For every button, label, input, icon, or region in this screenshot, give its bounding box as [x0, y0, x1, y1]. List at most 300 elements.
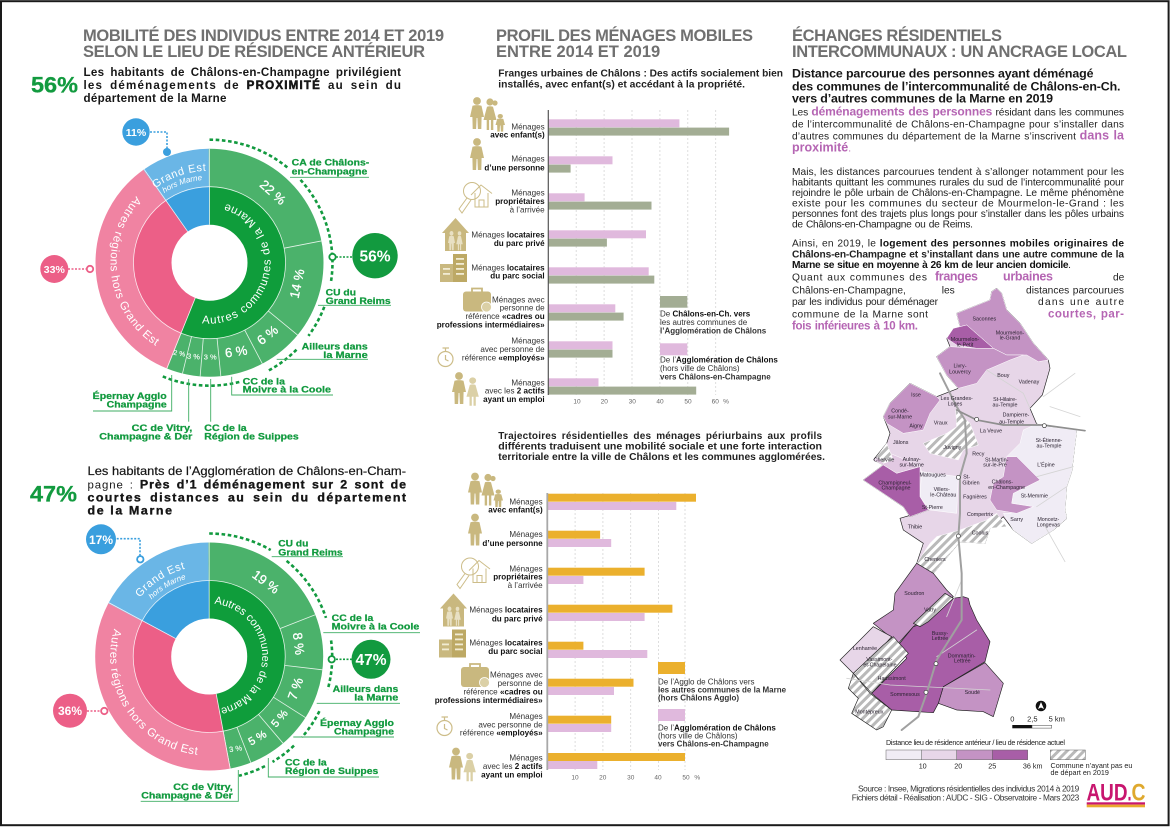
- map: noms des communes: au-Temple: [993, 403, 1017, 409]
- map: noms des communes: Villers-: [934, 487, 950, 493]
- label: CA de Châlons-en-Champagne: en-Champagne: [292, 166, 367, 176]
- map: noms des communes: St-Pierre: [922, 505, 943, 511]
- callout: 47 %: pagne : Près d’1 déménagement sur 2 sont de: [88, 478, 406, 492]
- map: noms des communes: Condé-: [891, 409, 909, 415]
- map legend: 36 km: [1023, 761, 1042, 770]
- map: noms des communes: Gibrien: [962, 480, 980, 486]
- axis values: 50: [684, 398, 692, 405]
- heading: trajectoires résidentielles: Trajectoires résidentielles des ménages périurbains aux profils: [498, 431, 822, 442]
- label: CC de Vitry, Champagne et Der: [99, 379, 193, 441]
- text block: distances: habitants quittant les communes rurales du sud de l’intercommunalité pour: [792, 178, 1125, 188]
- label: Ailleurs dans la Marne: Ailleurs dans: [302, 341, 368, 351]
- label: CU du Grand Reims: Grand Reims: [326, 296, 391, 306]
- category labels: Ménages: [511, 378, 545, 387]
- map legend: Distance lieu de résidence antérieur / lieu de résidence actuel: [886, 738, 1065, 747]
- category labels: Ménages locataires: [471, 263, 545, 272]
- category labels: du parc privé: [492, 614, 543, 623]
- map: noms des communes: Livry-: [953, 364, 967, 370]
- map: noms des communes: St-Étienne-: [1036, 437, 1063, 444]
- map: noms des communes: Saconnes: [972, 317, 997, 323]
- text block: franges urbaines: urbaines: [1003, 270, 1053, 284]
- map: noms des communes: Juvigny: [943, 445, 962, 451]
- text block: franges urbaines: distances parcourues: [1026, 285, 1124, 296]
- callout: 47 %: courtes distances au sein du département: [88, 490, 406, 504]
- title: échanges résidentiels: [792, 26, 1127, 61]
- label: CA de Châlons-en-Champagne: CA de Châlons-: [292, 158, 369, 168]
- label: Ailleurs dans la Marne: la Marne: [354, 693, 398, 703]
- heading: distance parcourue: vers d’autres communes de la Marne en 2019: [792, 92, 1053, 106]
- map: noms des communes: Dommartin-: [948, 653, 976, 659]
- category labels: à l’arrivée: [508, 581, 543, 590]
- bubble: 11 %: [122, 118, 171, 156]
- title: profil des ménages mobiles: ENTRE 2014 ET 2019: [496, 43, 660, 61]
- category labels: professions intermédiaires»: [437, 321, 545, 330]
- category labels: personne de: [498, 679, 543, 688]
- category labels: [435, 497, 543, 780]
- heading: franges urbaines: installés, avec enfant(s) et accédant à la propriété.: [498, 79, 745, 90]
- category labels: Ménages: [511, 155, 545, 164]
- segment percentages: 3 %: [187, 352, 200, 361]
- segment percentages: [229, 567, 308, 754]
- label: Épernay Agglo Champagne: Champagne: [334, 726, 394, 736]
- category labels: Ménages locataires: [471, 230, 545, 239]
- category labels: Ménages: [511, 122, 545, 131]
- map: noms des communes: Loges: [948, 401, 963, 407]
- map: noms des communes: Soudron: [904, 591, 924, 597]
- scale bar: 2,5: [1027, 715, 1038, 724]
- map: noms des communes: [853, 317, 1063, 716]
- category labels: Ménages avec: [492, 295, 545, 304]
- title: mobilité des individus: SELON LE LIEU DE RÉSIDENCE ANTÉRIEUR: [83, 42, 425, 61]
- category labels: référence «cadres ou: [463, 687, 543, 696]
- category labels: avec les 2 actifs: [483, 762, 543, 771]
- category labels: avec enfant(s): [488, 506, 543, 515]
- category labels: ayant un emploi: [481, 771, 543, 780]
- text block: franges urbaines: courtes, par-: [1048, 308, 1124, 320]
- segment percentages: 14 %: [287, 267, 308, 300]
- map: noms des communes: Lenharrée: [853, 646, 877, 652]
- title: mobilité des individus: [83, 26, 444, 61]
- title: échanges résidentiels: ÉCHANGES RÉSIDENTIELS: [792, 26, 1002, 45]
- map: échangeurs: [924, 417, 1046, 694]
- map: noms des communes: Aulnay-: [903, 457, 921, 463]
- text block: déménagements: de l’intercommunalité de Châlons-en-Champagne pour s’installer dans: [792, 120, 1124, 131]
- axis values: 50: [682, 774, 690, 781]
- map: noms des communes: Vraux: [934, 420, 948, 426]
- map: noms des communes: Champagne: [881, 486, 911, 492]
- icon: personne seule: [470, 138, 484, 170]
- map: noms des communes: Recy: [972, 452, 985, 458]
- text block: logement: [792, 239, 1124, 271]
- map: noms des communes: Lettrée: [954, 659, 971, 665]
- segment percentages: 6 %: [224, 342, 249, 360]
- text block: distances: rejoindre le pôle urbain de Châlons-en-Champagne. Le même phénomène: [792, 188, 1124, 199]
- map: noms des communes: le-Château: [930, 493, 956, 499]
- bar chart: franges urbaines: [437, 110, 729, 405]
- category labels: Ménages: [509, 564, 543, 573]
- axis values: 60: [712, 398, 719, 405]
- map: noms des communes: Lettrée: [932, 636, 948, 642]
- icon: mallette: [461, 664, 490, 688]
- icon: famille avec enfants: [470, 97, 505, 132]
- heading: distance parcourue: des communes de l’intercommunalité de Châlons-en-Ch.: [792, 80, 1120, 94]
- title: profil des ménages mobiles: [496, 26, 753, 61]
- label: CC de la Région de Suippes: CC de la: [285, 757, 328, 767]
- logo: AUDC: AUD: [1086, 780, 1128, 807]
- segment percentages: [173, 177, 308, 361]
- axis values: %: [694, 774, 700, 781]
- bubble: 47 %: 47%: [355, 652, 387, 669]
- label: CC de la Région de Suippes: [268, 757, 379, 777]
- label: CC de la Moivre à la Coole: Moivre à la Coole: [243, 385, 331, 395]
- label: Ailleurs dans la Marne: [317, 684, 400, 703]
- map legend: 25: [988, 761, 996, 770]
- source: Source : Insee, Migrations résidentielles des individus 2014 à 2019: [858, 784, 1080, 794]
- text block: déménagements: d’autres communes du département de la Marne s’inscrivent dans la: [792, 128, 1125, 142]
- ring label: Grand Est: Grand Est: [152, 164, 206, 187]
- category labels: professions intermédiaires»: [435, 696, 543, 705]
- scale bar: [1010, 715, 1065, 728]
- map: noms des communes: Châlons-: [992, 479, 1013, 485]
- map: noms des communes: Les Grandes-: [941, 396, 973, 402]
- label: Épernay Agglo Champagne: Champagne: [107, 400, 167, 410]
- donut chart: Agglomération de Châlons: [95, 532, 334, 777]
- axis values: 10: [573, 398, 581, 405]
- title: mobilité des individus: MOBILITÉ DES INDIVIDUS ENTRE 2014 ET 2019: [83, 26, 444, 45]
- text block: franges urbaines: franges: [935, 270, 978, 284]
- text block: logement: Marne se situe en moyenne à 26 km de leur ancien domicile.: [792, 260, 1071, 271]
- legend: franges urbaines: (hors ville de Châlons): [660, 364, 740, 373]
- callout: 56 % proximité: Les habitants de Châlons-en-Champagne privilégient: [84, 66, 401, 79]
- category labels: propriétaires: [495, 197, 545, 206]
- text block: franges urbaines: par les individus pour déménager: [792, 297, 939, 308]
- bubble: 36 %: 36%: [58, 704, 82, 718]
- label: CC de la Région de Suippes: Région de Suippes: [204, 431, 299, 441]
- ring label: hors Marne: hors Marne: [148, 575, 186, 600]
- axis values: 40: [654, 774, 662, 781]
- map: noms des communes: le-Grand: [1000, 336, 1020, 342]
- text block: franges urbaines: de: [1113, 273, 1125, 284]
- category labels: d’une personne: [484, 163, 545, 172]
- label: CC de la Moivre à la Coole: Moivre à la Coole: [332, 621, 419, 631]
- label: CU du Grand Reims: CU du: [278, 539, 308, 549]
- map: noms des communes: Aigny: [909, 424, 923, 430]
- bars: vers Agglomération: [548, 128, 729, 395]
- map: distance parcourue par commune: [840, 288, 1085, 730]
- category labels: ayant un emploi: [483, 395, 545, 404]
- label: Épernay Agglo Champagne: Épernay Agglo: [93, 391, 167, 401]
- map: noms des communes: Thibie: [908, 525, 922, 531]
- map: noms des communes: Vadenay: [1019, 380, 1040, 386]
- legend: trajectoires: (hors Châlons Agglo): [658, 694, 739, 702]
- map: noms des communes: Soudé: [965, 690, 980, 696]
- label: CU du Grand Reims: [318, 287, 391, 306]
- map: limites intercommunales nord: [863, 288, 1077, 573]
- category labels: propriétaires: [493, 573, 543, 582]
- label: Ailleurs dans la Marne: la Marne: [323, 350, 368, 360]
- category labels: avec les 2 actifs: [485, 387, 545, 396]
- label: CC de la Moivre à la Coole: [323, 613, 420, 633]
- icon: personne seule: [468, 514, 482, 546]
- title: profil des ménages mobiles: PROFIL DES MÉNAGES MOBILES: [496, 26, 753, 45]
- scale bar: 5 km: [1049, 715, 1065, 724]
- label: Épernay Agglo Champagne: [293, 718, 395, 737]
- icon: maison avec habitants: [440, 594, 467, 626]
- label: CC de la Région de Suippes: Région de Suippes: [285, 766, 378, 776]
- map legend: Commune n’ayant pas eu: [1050, 761, 1132, 770]
- callout: 47 %: [30, 465, 406, 518]
- segment percentages: 6 %: [254, 322, 281, 348]
- icon: famille avec enfants: [468, 473, 503, 507]
- label: Ailleurs dans la Marne: Ailleurs dans: [333, 684, 398, 694]
- text block: distances: existe pour les communes du secteur de Mourmelon-le-Grand : les: [792, 198, 1124, 210]
- map: noms des communes: le-Petit: [957, 342, 974, 348]
- scale bar: 0: [1010, 715, 1014, 724]
- axis values: [573, 398, 729, 405]
- donut chart: Châlons-en-Champagne: [96, 138, 334, 387]
- map: noms des communes: sur-Marne: [900, 462, 924, 468]
- heading: franges urbaines: [498, 69, 783, 90]
- category labels: du parc social: [490, 272, 545, 281]
- map: noms des communes: Mourmelon-: [996, 330, 1024, 336]
- map: noms des communes: Moncetz-: [1037, 517, 1060, 523]
- heading: franges urbaines: Franges urbaines de Châlons : Des actifs socialement bien: [498, 69, 783, 80]
- source: [852, 784, 1080, 802]
- map: noms des communes: St-Hilaire-: [993, 397, 1017, 403]
- category labels: à l’arrivée: [510, 205, 545, 214]
- legend: franges urbaines: De l’Agglomération de Châlons: [660, 356, 778, 365]
- map: noms des communes: Sommesous: [890, 692, 920, 698]
- map: noms des communes: sur-le-Pré: [983, 463, 1007, 469]
- map: noms des communes: Jâlons: [893, 440, 909, 446]
- bubble: 56 %: [329, 233, 398, 278]
- text block: distances: de Châlons-en-Champagne ou de Reims.: [792, 220, 973, 230]
- map: noms des communes: au-Temple: [999, 419, 1024, 425]
- map: noms des communes: Louvercy: [949, 369, 971, 375]
- category labels: Ménages: [509, 530, 543, 539]
- bubble: 17 %: [86, 524, 144, 562]
- map: noms des communes: Haussimont: [878, 676, 906, 682]
- icon: couple d'actifs: [449, 748, 476, 781]
- ring label: hors Marne: hors Marne: [162, 176, 202, 193]
- map: noms des communes: et-Chapelaine: [863, 662, 897, 668]
- segment percentages: 3 %: [229, 743, 243, 754]
- ring label: Grand Est: Grand Est: [136, 562, 185, 596]
- label: CA de Châlons-en-Champagne: [290, 158, 369, 177]
- legend: trajectoires: [658, 662, 787, 749]
- label: Ailleurs dans la Marne: [277, 341, 368, 360]
- callout: 47 %: Les habitants de l’Agglomération de Châlons-en-Cham-: [88, 465, 406, 478]
- map: noms des communes: Cherville: [874, 458, 894, 464]
- label: CC de Vitry, Champagne et Der: CC de Vitry,: [132, 423, 192, 433]
- map: noms des communes: Matougues: [919, 473, 946, 479]
- label: CU du Grand Reims: [272, 539, 343, 557]
- axis values: 40: [656, 398, 664, 405]
- bubble: 56 %: 56%: [359, 248, 391, 266]
- map: noms des communes: Mourmelon-: [951, 337, 979, 343]
- map: noms des communes: Longevas: [1037, 523, 1060, 529]
- segment percentages: 5 %: [269, 708, 291, 730]
- category labels: du parc privé: [494, 239, 545, 248]
- category labels: Ménages: [511, 337, 545, 346]
- map: noms des communes: St-: [963, 474, 970, 480]
- axis values: 30: [629, 398, 636, 405]
- map: noms des communes: au-Temple: [1037, 443, 1061, 449]
- label: Épernay Agglo Champagne: Épernay Agglo: [320, 718, 395, 728]
- map: noms des communes: L’Épine: [1037, 461, 1055, 468]
- map: réseau routier: [847, 370, 1085, 730]
- axis values: [571, 774, 700, 781]
- legend: trajectoires: les autres communes de la Marne: [658, 686, 787, 694]
- icon: couple d'actifs: [452, 372, 479, 406]
- callout: 56 % proximité: département de la Marne: [84, 92, 227, 105]
- map: noms des communes: Compertrix: [967, 512, 993, 518]
- label: CC de la Région de Suippes: [204, 379, 299, 441]
- icon: clés et maison: [457, 558, 490, 588]
- category labels: Ménages avec: [490, 671, 543, 680]
- map: noms des communes: Fagnières: [963, 494, 987, 500]
- bubble: 33 %: 33%: [44, 264, 65, 276]
- text block: franges urbaines: les: [942, 285, 955, 296]
- text block: distances: personnes font des trajets plus longs pour s’installer dans les pôles urbains: [792, 209, 1124, 220]
- bubble: 17 %: 17%: [89, 533, 113, 547]
- category labels: Ménages locataires: [469, 606, 543, 615]
- map: noms des communes: St-Martin-: [985, 458, 1009, 464]
- callout: 56 % proximité: les déménagements de PROXIMITÉ au sein du: [84, 79, 401, 92]
- category labels: avec personne de: [480, 345, 545, 354]
- segment percentages: 5 %: [246, 728, 269, 748]
- label: CC de la Moivre à la Coole: [232, 376, 333, 395]
- icon: mallette: [463, 288, 492, 312]
- heading: distance parcourue: [792, 67, 1120, 106]
- bars: vers Châlons: [548, 119, 679, 386]
- label: CC de Vitry, Champagne et Der: Champagne & Der: [99, 431, 193, 441]
- text block: déménagements: Les déménagements des personnes résidant dans les communes: [792, 105, 1124, 119]
- legend: trajectoires: vers Châlons-en-Champagne: [658, 740, 769, 749]
- bar chart: trajectoires: [435, 493, 700, 781]
- heading: trajectoires résidentielles: [498, 431, 825, 463]
- title: échanges résidentiels: INTERCOMMUNAUX : UN ANCRAGE LOCAL: [792, 43, 1127, 61]
- callout: 56 % proximité: [31, 66, 401, 105]
- logo: AUDC: .: [1128, 780, 1132, 807]
- map: noms des communes: Isse: [911, 393, 921, 399]
- text block: franges urbaines: fois inférieures à 10 km.: [792, 320, 918, 332]
- map: noms des communes: Montépreux: [855, 710, 884, 716]
- dotted arc: Marne: [209, 534, 332, 776]
- ring label: autres communes de la Marne: Autres communes de la Marne: [202, 204, 271, 324]
- legend: franges urbaines: l’Agglomération de Châlons: [660, 326, 767, 335]
- category labels: Ménages: [509, 754, 543, 763]
- map: noms des communes: Coolus: [972, 530, 989, 536]
- axis values: 20: [601, 398, 608, 405]
- text block: distances: [792, 167, 1125, 230]
- icon: chronomètre: [437, 717, 452, 736]
- category labels: [437, 122, 545, 404]
- category labels: référence «cadres ou: [465, 312, 545, 321]
- label: CC de Vitry, Champagne et Der: Champagne & Der: [141, 790, 233, 800]
- category labels: Ménages: [509, 712, 543, 721]
- map: limites intercommunales sud: [840, 563, 1003, 730]
- label: CC de la Région de Suippes: CC de la: [204, 423, 248, 433]
- icon: clés et maison: [459, 182, 492, 213]
- category labels: avec personne de: [478, 720, 543, 729]
- label: CU du Grand Reims: Grand Reims: [278, 547, 343, 557]
- label: CC de Vitry, Champagne et Der: [141, 770, 238, 801]
- map: noms des communes: Bussy-: [932, 631, 948, 637]
- bubble: 47 %: [328, 640, 390, 679]
- icon: chronomètre: [438, 348, 453, 366]
- logo: AUDC: C: [1132, 780, 1146, 807]
- heading: distance parcourue: Distance parcourue des personnes ayant déménagé: [792, 67, 1094, 81]
- map: noms des communes: St-Memmie: [1021, 494, 1048, 500]
- segment percentages: 19 %: [249, 567, 282, 597]
- map: noms des communes: Vatry: [924, 608, 936, 614]
- ring label: autres régions hors Grand Est: Autres régions hors Grand Est: [110, 196, 159, 346]
- bubble: 33 %: [40, 255, 93, 283]
- segment percentages: 2 %: [173, 350, 186, 359]
- ring label: autres communes de la Marne: Autres communes de la Marne: [214, 596, 268, 714]
- legend: trajectoires: (hors ville de Châlons): [658, 732, 738, 741]
- map legend: 10: [919, 761, 927, 770]
- segment percentages: 22 %: [257, 177, 289, 208]
- category labels: référence «employés»: [460, 729, 543, 738]
- heading: trajectoires résidentielles: différents traduisent une mobilité sociale et une forte interaction: [498, 441, 822, 452]
- text block: franges urbaines: Quant aux communes des: [792, 273, 927, 284]
- map: noms des communes: Champigneul-: [878, 480, 912, 486]
- text block: déménagements: [792, 105, 1125, 155]
- label: CC de la Moivre à la Coole: CC de la: [243, 376, 286, 386]
- text block: déménagements: proximité.: [792, 141, 851, 155]
- text block: franges urbaines: [792, 270, 1125, 332]
- map legend: 20: [954, 761, 962, 770]
- icon: immeubles: [440, 254, 467, 282]
- map: noms des communes: sur-Marne: [888, 414, 912, 420]
- callout: 56 % proximité: 56%: [31, 73, 78, 98]
- category labels: référence «employés»: [462, 353, 545, 362]
- axis values: 10: [571, 774, 579, 781]
- segment percentages: 3 %: [204, 352, 217, 361]
- map: noms des communes: Cheniers: [924, 557, 946, 563]
- dotted arc: Marne: [161, 140, 332, 386]
- legend: trajectoires: De l’Agglomération de Châlons: [658, 723, 776, 732]
- ring label: autres régions hors Grand Est: Autres régions hors Grand Est: [110, 628, 198, 755]
- map: noms des communes: Vassimont-: [866, 657, 893, 663]
- heading: trajectoires résidentielles: territoriale entre la ville de Châlons et les communes agglomérées.: [498, 452, 825, 463]
- label: CC de la Moivre à la Coole: CC de la: [332, 613, 374, 623]
- bubble: 11 %: 11%: [126, 127, 147, 139]
- category labels: avec enfant(s): [490, 131, 545, 140]
- callout: 47 %: 47%: [30, 482, 77, 507]
- category labels: du parc social: [488, 647, 543, 656]
- icon: nord: [1036, 701, 1046, 711]
- legend: franges urbaines: [660, 296, 778, 381]
- map: noms des communes: Sarry: [1010, 517, 1023, 523]
- text block: distances: Mais, les distances parcourues tendent à s’allonger notamment pour les: [792, 167, 1124, 178]
- bars: vers Châlons: [547, 502, 676, 769]
- label: CU du Grand Reims: CU du: [326, 287, 356, 297]
- map: noms des communes: Dampierre-: [1003, 413, 1030, 419]
- category labels: d’une personne: [482, 539, 543, 548]
- source: Fichiers détail - Réalisation : AUDC - SIG - Observatoire - Mars 2023: [852, 792, 1080, 802]
- map legend: de départ en 2019: [1050, 768, 1109, 777]
- category labels: Ménages locataires: [469, 638, 543, 647]
- label: Épernay Agglo Champagne: [93, 375, 172, 411]
- segment percentages: 8 %: [290, 632, 308, 656]
- label: CC de Vitry, Champagne et Der: CC de Vitry,: [173, 782, 233, 792]
- legend: trajectoires: De l’Agglo de Châlons vers: [658, 677, 754, 686]
- category labels: personne de: [500, 304, 545, 313]
- segment percentages: 7 %: [285, 675, 306, 702]
